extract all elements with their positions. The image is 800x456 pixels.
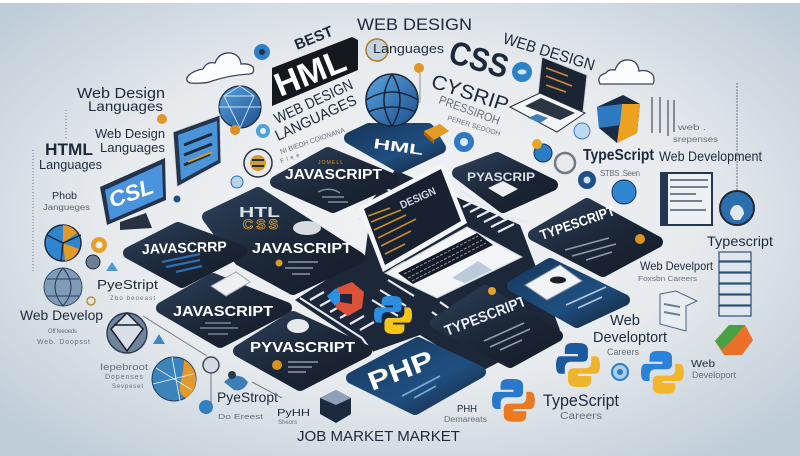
label: TypeScript: TypeScript: [583, 147, 655, 164]
label: Web Develop left: Web. Doopsst: [37, 339, 90, 346]
icon: python logo centre: [374, 296, 412, 334]
blurred caption top right: [673, 123, 718, 144]
left labels: Web Design: [95, 126, 165, 141]
card tag: JOMELL: [318, 160, 343, 166]
label: TypeScript careers: TypeScript: [543, 391, 619, 410]
icon: server stack: [719, 252, 751, 316]
icon: red hexagon logo: [327, 282, 364, 316]
document sticker: [211, 272, 250, 296]
card title: TYPESCRIPT: [538, 202, 617, 243]
label: PyeStropt: [217, 389, 310, 426]
card details: [484, 323, 530, 350]
decorative chart strokes: [652, 97, 674, 136]
icon: black and orange gear badge: [244, 149, 272, 177]
blurred caption top right: web .: [677, 123, 706, 132]
card details: [272, 360, 318, 372]
card: HTML CSS and JavaScript: [208, 193, 359, 289]
left labels: Web Design: [77, 85, 165, 102]
card: PyaScript: [458, 158, 552, 207]
keyboard: [398, 233, 493, 284]
caption: STBS .Seen: [600, 169, 640, 178]
icon: python logo large: [556, 343, 600, 387]
screen code lines: [368, 208, 416, 254]
icon: cloud right: [599, 60, 654, 84]
monitor screen: [178, 121, 218, 180]
label: Web Developort careers: Web Develport: [640, 259, 714, 273]
heading: Web Design right: WEB DESIGN: [501, 31, 597, 75]
HML block: [269, 37, 358, 106]
icon: large globe bottom: [152, 357, 196, 401]
label: PyeStript left: [97, 277, 158, 302]
left labels: Languages: [39, 157, 102, 172]
card: PHP: [352, 343, 480, 409]
caption: Pressiroh: PRESSIROH: [437, 93, 502, 128]
label: PHP demand: Demareats: [444, 415, 487, 424]
label: PyeStript left: PyeStript: [97, 277, 158, 292]
icon: diamond globe: [107, 313, 147, 353]
label: Iepebroot: Sevpeset: [112, 384, 143, 390]
laptop top right: [510, 57, 587, 132]
left labels: HTML: [45, 140, 93, 159]
label: Job Market: JOB MARKET MARKET: [297, 428, 460, 445]
label: PHP demand: [444, 404, 487, 424]
left labels: [39, 85, 166, 212]
icon: gold block: [424, 124, 449, 144]
card: HTML top: [350, 129, 440, 167]
label: Languages top: Languages: [373, 41, 445, 56]
card details: [162, 254, 202, 272]
card title HML: HML: [373, 135, 425, 158]
left labels: Jangueges: [43, 203, 90, 212]
left labels: Languages: [88, 98, 163, 114]
card: JavaScript left: [162, 272, 286, 342]
subtitle: Web Design Languages: WEB DESIGN: [272, 76, 356, 128]
icon: cube: [597, 95, 640, 143]
label: Web Developtort careers: Developtort: [593, 329, 668, 346]
trackpad: [452, 261, 492, 283]
screen heading: DESIGN: [398, 185, 438, 212]
icon: hanging circle: [720, 83, 754, 225]
label: Web Develop left: [20, 307, 103, 346]
label: Web Develop left: Web Develop: [20, 307, 103, 323]
subtitle: Web Design Languages: LANGUAGES: [273, 92, 359, 145]
icon: green orange hexagon: [715, 325, 753, 355]
icon: documents: [660, 291, 697, 331]
main title: Best: BEST: [292, 23, 336, 54]
card: JavaScript upper: [276, 153, 394, 207]
icon: dark cube bottom: [320, 390, 351, 423]
label: Iepebroot: Iepebroot: [100, 362, 149, 372]
card title: JAVASCRRP: [142, 238, 227, 257]
card title: JAVASCRIPT: [173, 303, 273, 320]
blurred caption top right: srepenses: [673, 135, 718, 144]
icon: globe left: [219, 86, 261, 128]
small circle icons: [86, 44, 636, 414]
circuit board behind cards: [295, 170, 560, 372]
card: PyVascript: [239, 317, 366, 385]
base: [510, 93, 585, 132]
card title: PYVASCRIPT: [250, 339, 355, 356]
laptop base: [385, 227, 522, 298]
label: Iepebroot: [100, 362, 149, 390]
icon: CSL monitor: [100, 158, 166, 230]
icon: python logo orange: [492, 379, 535, 422]
label: PyeStropt: Sheors: [278, 420, 297, 426]
icon: cloud left: [187, 53, 254, 83]
label: Web Developtort careers: Careers: [607, 347, 639, 357]
label: Web Developort careers: [638, 259, 714, 283]
label: TypeScript careers: [543, 391, 619, 422]
label: Web Developtort careers: [593, 312, 668, 357]
card details: [318, 189, 348, 202]
card title: TYPESCRIPT: [442, 293, 529, 340]
label: Typescript right: Typescript: [707, 233, 773, 249]
label: Iepebroot: Dopenses: [105, 374, 144, 381]
heading: CSS: CSS: [445, 33, 513, 85]
heading: Cysrip: CYSRIP: [428, 71, 511, 116]
label: PHP demand: PHH: [457, 404, 477, 415]
icon: monitor with code: [173, 115, 221, 187]
photo sticker: [525, 265, 582, 300]
left labels: Languages: [100, 140, 166, 155]
block text: HML: [269, 41, 351, 103]
icon: blue orange globe: [45, 225, 81, 261]
central laptop: [358, 163, 522, 298]
card title: PHP: [363, 344, 438, 397]
icon: globe top centre: [366, 74, 418, 126]
label: Web Developort careers: Foxsbn Careers: [638, 276, 698, 283]
card details: [200, 323, 238, 334]
card details: [565, 234, 645, 260]
card title JavaScript: JAVASCRIPT: [285, 166, 382, 183]
card title JavaScript: JAVASCRIPT: [252, 240, 352, 257]
small caption under subtitle: NI BIEDH COIONANA: [279, 127, 346, 156]
card title CSS: CSS: [243, 216, 278, 232]
card emblem: [488, 181, 518, 197]
small caption under subtitle: Flee: [280, 152, 301, 165]
label: TypeScript careers: Careers: [560, 411, 602, 422]
label: Web Develop left: Off feeoeds: [48, 329, 77, 335]
card emblem: [287, 319, 309, 333]
label: PyeStript left: Zbo beoeast: [110, 296, 155, 302]
card details: [276, 260, 318, 274]
left labels: Phob: [52, 191, 77, 202]
icon: blue bird: [224, 371, 248, 390]
card details: [566, 287, 606, 308]
card title HTL: HTL: [239, 204, 280, 221]
caption: Perer: PERER SEDOOH: [446, 115, 501, 138]
main title: Web Design: WEB DESIGN: [357, 15, 472, 34]
label: Web Developort small: [691, 359, 736, 380]
card: blue image card: [513, 264, 624, 322]
icon: small top badge: [366, 39, 388, 61]
label: PyeStropt: PyeStropt: [217, 389, 278, 405]
card: TypeScript upper: [534, 202, 657, 271]
stand: [120, 213, 152, 230]
monitor text: CSL: [105, 173, 157, 213]
icon: python logo right: [641, 351, 684, 394]
icon: mesh globe left: [44, 268, 82, 306]
label: Web Development: Web Development: [659, 148, 762, 164]
label: PyeStropt: PyHH: [277, 408, 310, 419]
card title: PYASCRIP: [467, 170, 535, 184]
card details: [402, 376, 440, 398]
code: [546, 68, 572, 92]
doc panel: [661, 173, 712, 225]
label: Web Developort small: Developort: [692, 370, 736, 380]
label: PyeStropt: Do Ereest: [218, 414, 263, 421]
label: Web Developtort careers: Web: [610, 312, 640, 329]
connector lines: [33, 110, 282, 408]
card emblem: [293, 221, 321, 235]
label: Web Developort small: Web: [691, 359, 716, 370]
card: JavaSRRP: [129, 228, 241, 282]
laptop screen: [358, 163, 467, 272]
card: TypeScript lower: [436, 291, 557, 362]
